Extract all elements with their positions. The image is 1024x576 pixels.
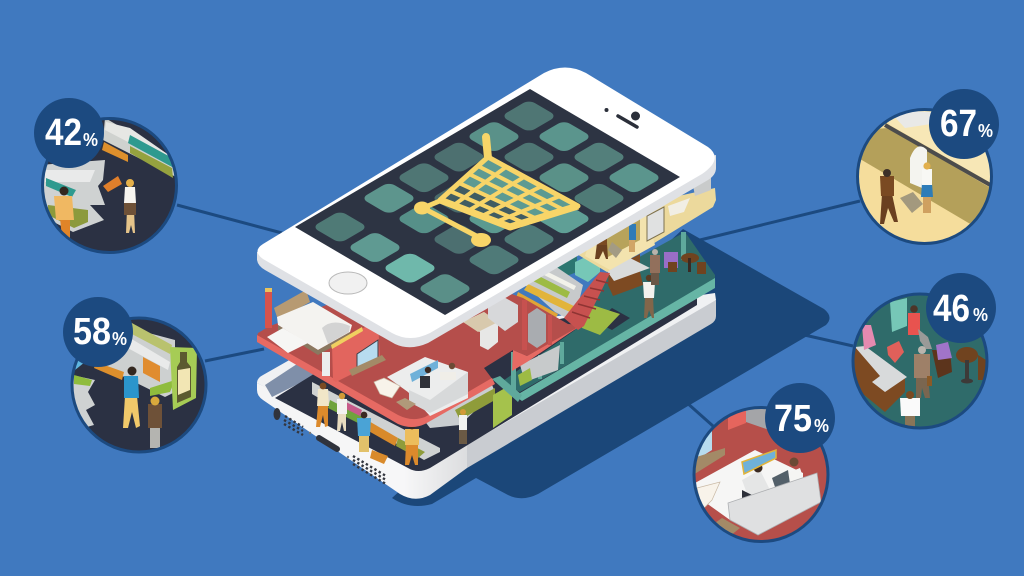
base front face — [257, 383, 467, 499]
connector lines — [177, 201, 860, 426]
back wall — [553, 245, 577, 280]
shopper with orange trousers — [54, 186, 74, 238]
phone shadow — [392, 229, 830, 506]
woman in pink — [862, 325, 876, 350]
badge: 46% — [926, 273, 996, 343]
feature wall — [332, 320, 380, 382]
badge: 42% — [34, 98, 104, 168]
chair — [697, 482, 720, 510]
teal stairs — [492, 376, 522, 402]
bar patron in red — [908, 305, 932, 349]
red stairs — [564, 272, 610, 330]
red sign — [887, 341, 904, 363]
green banner with bottle — [170, 347, 197, 410]
side table — [396, 398, 416, 410]
panel: 58 percent store banner — [63, 297, 210, 456]
red floor edge — [257, 335, 495, 427]
teal pillars — [511, 232, 686, 390]
people on sofa — [741, 449, 804, 498]
teal middle floor — [492, 232, 715, 402]
bed — [274, 290, 352, 355]
white sofa seat — [695, 450, 803, 520]
base rim — [257, 293, 716, 462]
badge: 67%: 67 — [940, 103, 977, 145]
badge: 58% — [63, 297, 133, 367]
arched door — [910, 146, 927, 190]
cafe counter — [608, 254, 643, 296]
store shelves — [522, 264, 583, 322]
top floor guests — [595, 233, 608, 259]
man in white — [900, 391, 920, 428]
rug — [267, 328, 308, 353]
panel: 67 percent hotel corridor — [855, 89, 999, 247]
side column — [322, 352, 330, 376]
chair — [374, 378, 400, 398]
earpiece and camera — [604, 108, 640, 127]
red floor — [257, 272, 610, 427]
panel: 42 percent store aisle — [34, 98, 180, 256]
badge: 67% — [929, 89, 999, 159]
dark atrium opening — [596, 308, 630, 330]
phone face — [258, 68, 715, 338]
inner wall — [265, 362, 330, 397]
badge: 42%: % — [83, 130, 98, 150]
side table — [716, 518, 740, 534]
porter with luggage — [880, 169, 898, 224]
shopper in blue — [123, 366, 140, 428]
cafe table with guest — [932, 342, 986, 384]
badge: 58%: 58 — [73, 311, 111, 353]
yellow top floor — [575, 172, 716, 272]
screen — [295, 89, 680, 315]
man in brown — [148, 396, 162, 448]
badge: 58%: % — [112, 329, 127, 349]
badge: 75% — [765, 383, 835, 453]
kitchen counter — [463, 312, 498, 350]
badge: 46%: 46 — [933, 288, 970, 330]
tv — [357, 340, 378, 368]
panel: 46 percent cafe — [850, 273, 996, 431]
woman shopper — [124, 179, 136, 233]
shoppers — [316, 383, 467, 465]
badge: 42%: 42 — [45, 112, 82, 154]
elevator door — [647, 207, 664, 241]
phone base — [257, 292, 716, 499]
store aisle — [312, 380, 512, 460]
home button — [329, 272, 367, 294]
sofa front — [728, 473, 821, 535]
base side face — [467, 298, 716, 468]
base screen floor — [275, 292, 697, 471]
cafe people and tables — [643, 249, 706, 318]
red column — [265, 290, 272, 328]
speaker holes and port — [274, 408, 386, 484]
badge: 75%: % — [814, 416, 829, 436]
phone top — [257, 68, 716, 347]
panel: 75 percent living room — [690, 383, 835, 546]
badge: 67%: % — [978, 121, 993, 141]
teal floor edge — [515, 278, 715, 401]
badge: 46%: % — [973, 305, 988, 325]
woman with clipboard — [921, 162, 933, 213]
sofa — [387, 357, 468, 416]
appliances — [488, 296, 518, 331]
app tiles — [312, 100, 662, 305]
fridge — [528, 308, 546, 348]
man with bag — [914, 346, 930, 398]
icon: shopping cart — [414, 137, 578, 247]
badge: 75%: 75 — [774, 398, 812, 440]
tv stand — [349, 355, 386, 376]
phone edge — [257, 155, 716, 347]
